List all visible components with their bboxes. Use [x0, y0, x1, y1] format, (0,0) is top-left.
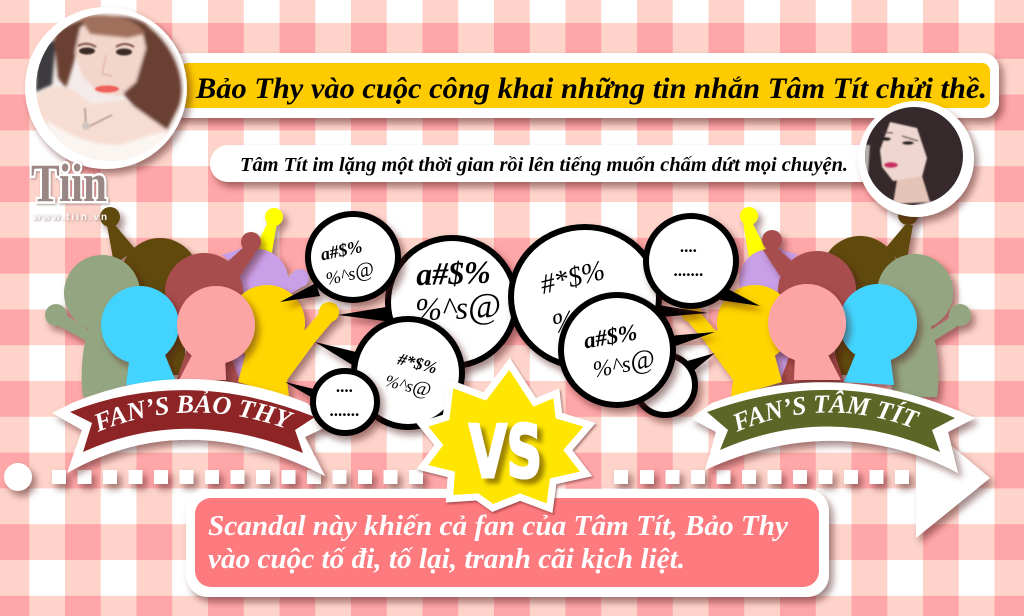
timeline with arrow — [4, 416, 990, 538]
fan silhouette: maroon right — [762, 230, 856, 382]
logo: Tiin watermark: Tiin — [31, 153, 107, 213]
bubble: middle right: %^s@ — [591, 343, 657, 382]
fan silhouette: cyan — [101, 286, 179, 385]
bubble: large right: %^s@ — [549, 293, 626, 340]
bubble: top small right — [646, 216, 760, 306]
subtitle bar — [210, 145, 880, 182]
fan silhouette: purple — [222, 247, 309, 382]
speech bubbles: left group — [280, 214, 516, 433]
ribbon: Fan's Tâm Tít — [692, 382, 981, 480]
fan silhouette: yellow right — [740, 207, 766, 258]
bubble: bottom small left — [285, 371, 377, 433]
bubble: large left: a#$% — [415, 254, 491, 292]
bubble: middle right — [561, 295, 715, 405]
bubble: top small left: %^s@ — [324, 256, 376, 289]
VS starburst — [428, 370, 583, 504]
bubble: behind small right — [635, 353, 715, 415]
subtitle text: Tâm Tít im lặng một thời gian rồi lên tiếng muốn chấm dứt mọi chuyện. — [240, 154, 848, 176]
bubble: large right: #*$% — [537, 255, 608, 301]
fan silhouette: brown — [100, 207, 199, 375]
fan silhouette: brown right — [821, 205, 918, 375]
caption text: vào cuộc tố đi, tố lại, tranh cãi kịch liệt. — [208, 544, 685, 575]
fan silhouette: green — [45, 255, 140, 397]
speech bubbles: right group — [511, 216, 760, 415]
ribbon label: FAN’S TÂM TÍT — [733, 390, 920, 432]
portrait: Tâm Tít — [858, 101, 974, 217]
fan silhouette: green right — [877, 254, 971, 397]
bubble: large left: %^s@ — [415, 285, 502, 327]
title bar — [170, 53, 999, 118]
fan silhouette: yellow — [254, 208, 283, 258]
fan silhouette: pink — [177, 286, 255, 380]
fan silhouette: purple right — [739, 247, 801, 382]
bubble: middle left — [315, 319, 462, 427]
fan silhouette: gold right — [681, 285, 793, 397]
fan silhouette: gold — [229, 285, 339, 397]
bubble: top small left: a#$% — [319, 236, 364, 264]
bubble: middle left: %^s@ — [383, 371, 433, 402]
bubble: top small left — [280, 214, 398, 302]
ribbon: Fan's Bảo Thy — [52, 379, 333, 482]
portrait: Bảo Thy — [25, 7, 190, 169]
bubble: large right — [511, 227, 708, 367]
logo url: www.tiin.vn — [32, 212, 107, 223]
bubble: bottom small left: ....... — [330, 401, 360, 420]
fan silhouette: cyan right — [839, 284, 917, 385]
title text: Bảo Thy vào cuộc công khai những tin nhắn Tâm Tít chửi thề. — [195, 72, 987, 105]
bubble: top small right: ....... — [674, 261, 704, 280]
bubble: middle right: a#$% — [582, 319, 639, 353]
caption text: Scandal này khiến cả fan của Tâm Tít, Bảo Thy — [208, 511, 789, 542]
bubble: middle left: #*$% — [395, 349, 439, 378]
bubble: top small right: .... — [680, 237, 698, 256]
fans group: Bảo Thy — [45, 207, 339, 397]
bubble: bottom small left: .... — [336, 377, 354, 396]
caption box — [186, 489, 829, 597]
bubble: large left — [338, 238, 516, 366]
VS label: VS — [469, 410, 542, 494]
fan silhouette: pink right — [768, 284, 846, 380]
ribbon label: FAN’S BẢO THY — [94, 390, 295, 432]
fan silhouette: maroon — [165, 232, 261, 382]
fans group: Tâm Tít — [681, 205, 971, 397]
